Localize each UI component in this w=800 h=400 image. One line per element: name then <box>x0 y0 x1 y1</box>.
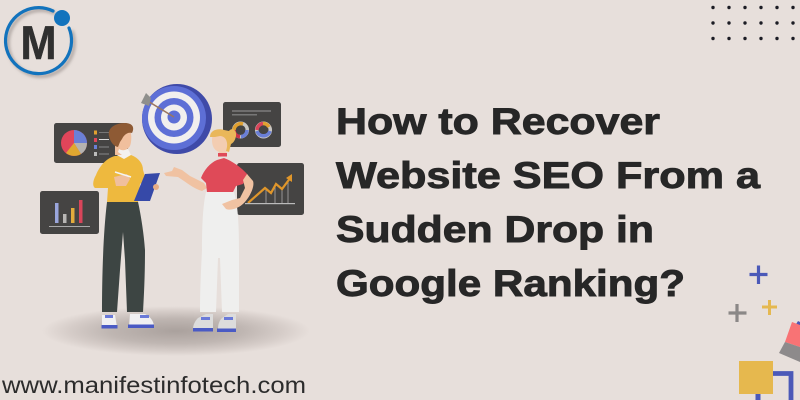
shoes <box>102 315 117 327</box>
panel: donut charts card <box>223 102 281 147</box>
woman figure <box>164 129 253 332</box>
logo: M <box>20 16 56 69</box>
head <box>115 128 131 155</box>
title: How to Recover <box>336 101 660 142</box>
hair <box>109 123 133 147</box>
icon: blue plus <box>750 266 768 284</box>
man figure <box>93 123 160 328</box>
title: Sudden Drop in <box>336 209 654 250</box>
title: Website SEO From a <box>336 155 760 196</box>
pen <box>115 172 131 177</box>
pie chart <box>61 130 87 156</box>
trousers <box>102 202 145 312</box>
legend <box>94 130 109 156</box>
logo <box>6 8 74 76</box>
donut charts <box>234 123 270 137</box>
trousers <box>200 192 239 312</box>
shirt <box>201 158 248 192</box>
icon: yellow plus <box>762 300 777 315</box>
thumb <box>153 184 159 190</box>
title <box>336 101 760 304</box>
icon: dot grid <box>711 6 795 40</box>
hair <box>210 129 236 152</box>
line chart <box>245 174 295 204</box>
collar <box>115 149 131 159</box>
title: Google Ranking? <box>336 263 685 304</box>
clipboard <box>134 173 160 201</box>
arm right <box>222 174 253 210</box>
arm left <box>164 167 207 191</box>
panel: growth chart card <box>237 163 304 215</box>
sweater <box>93 155 146 202</box>
decorative shapes corner <box>739 321 800 400</box>
icon: target with arrow <box>141 84 212 154</box>
panel: pie chart card <box>54 123 128 163</box>
floor shadow <box>42 306 310 356</box>
panel: bar chart card <box>40 191 99 234</box>
scarf <box>218 153 227 156</box>
hand <box>114 174 130 186</box>
bar chart <box>49 200 90 227</box>
neck and head <box>212 132 229 157</box>
icon: grey plus <box>728 304 746 322</box>
shoes <box>193 314 213 329</box>
website url: www.manifestinfotech.com <box>1 372 306 398</box>
